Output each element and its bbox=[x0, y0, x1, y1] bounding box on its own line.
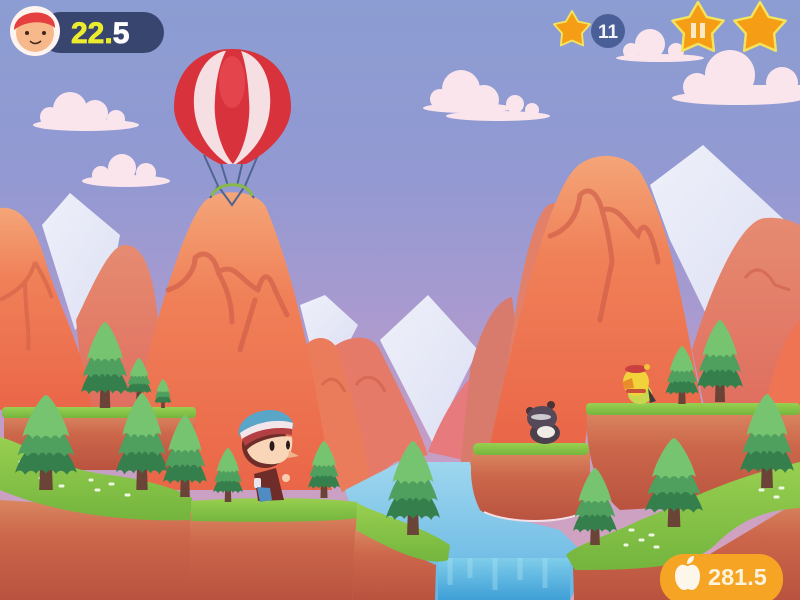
back left platform bbox=[2, 407, 196, 470]
HUD: pause button star bbox=[672, 2, 724, 51]
apple score value: 281.5 bbox=[708, 564, 767, 590]
mountain: small right bbox=[330, 338, 428, 482]
tree 2 bbox=[126, 358, 152, 400]
balloon center highlight bbox=[219, 56, 245, 108]
cloud: center bbox=[423, 70, 550, 121]
HUD: player avatar bbox=[10, 6, 60, 56]
hero arm cuff bbox=[254, 478, 261, 488]
balloon ropes bbox=[204, 155, 258, 205]
HUD: star count badge bbox=[591, 14, 625, 48]
hero body bbox=[254, 468, 284, 501]
tree 9 bbox=[386, 441, 440, 535]
tree 11 bbox=[645, 438, 703, 527]
mountain: right back slim bbox=[460, 297, 525, 470]
tree 10 bbox=[573, 468, 617, 545]
mountain: far left front bbox=[0, 208, 92, 410]
mountain: pink back center bbox=[428, 376, 472, 462]
front right hill bbox=[566, 462, 800, 600]
tree 12 bbox=[740, 394, 794, 488]
mountain: far left back bbox=[76, 245, 160, 410]
tree 6 bbox=[163, 415, 207, 497]
cloud: lower left bbox=[82, 154, 170, 187]
snow peak: right bbox=[650, 145, 790, 312]
hero hat red band bbox=[242, 428, 292, 446]
mountain: central tall peak under balloon bbox=[140, 192, 332, 490]
tree 5 bbox=[116, 393, 168, 490]
mountain: small left bbox=[306, 338, 370, 492]
hero hand bbox=[282, 474, 290, 482]
hero hair and head bbox=[242, 422, 288, 468]
pill background bbox=[40, 12, 164, 53]
balloon envelope bbox=[174, 49, 291, 164]
tree 7 bbox=[213, 448, 243, 502]
mountain: right edge foreground bbox=[765, 320, 800, 410]
hero bag bbox=[257, 487, 272, 502]
right high platform bbox=[586, 403, 800, 510]
tree 14 bbox=[697, 320, 743, 402]
mountain: right back tall bbox=[498, 203, 580, 440]
balloon basket ring bbox=[212, 185, 252, 196]
mountain: right main peak bbox=[490, 156, 702, 445]
tree 3 bbox=[154, 379, 172, 408]
mountain: far right bbox=[692, 218, 800, 410]
waterfall bbox=[438, 558, 570, 600]
HUD: player timer pill bbox=[40, 12, 164, 53]
hero hat white band bbox=[240, 421, 293, 440]
middle platform bbox=[190, 498, 358, 600]
HUD: bonus star bbox=[734, 2, 786, 51]
floating center platform bbox=[471, 443, 590, 521]
dark raccoon enemy bbox=[526, 401, 560, 444]
HUD: star counter icon bbox=[554, 11, 590, 45]
right-of-middle small ledge bbox=[352, 503, 450, 600]
snow peak: small center bbox=[300, 295, 358, 360]
hot air balloon bbox=[174, 49, 291, 205]
snow peak: far left bbox=[42, 193, 120, 330]
hero hat bbox=[239, 410, 293, 436]
apple icon bbox=[675, 556, 700, 590]
tree 13 bbox=[666, 346, 698, 404]
cloud: behind pause star bbox=[616, 29, 704, 62]
pill background bbox=[660, 554, 783, 600]
tree 8 bbox=[308, 441, 340, 498]
HUD: apple score pill bbox=[660, 554, 783, 600]
yellow duck enemy bbox=[622, 364, 656, 404]
hero eyes bbox=[270, 440, 290, 451]
HUD: star count badge: 11 bbox=[598, 22, 618, 43]
snow peak: center bbox=[380, 295, 478, 442]
hero nose bbox=[288, 451, 299, 458]
cloud: upper left bbox=[33, 92, 139, 131]
front left hill bbox=[0, 437, 192, 600]
hero face bbox=[247, 436, 292, 464]
balloon white stripes bbox=[194, 51, 270, 164]
tree 4 bbox=[15, 395, 77, 490]
timer value: 22.5 bbox=[71, 17, 129, 50]
water river bbox=[345, 462, 590, 600]
cloud: upper right bbox=[672, 50, 800, 105]
hero character bbox=[239, 410, 299, 502]
tree 1 bbox=[81, 322, 129, 408]
